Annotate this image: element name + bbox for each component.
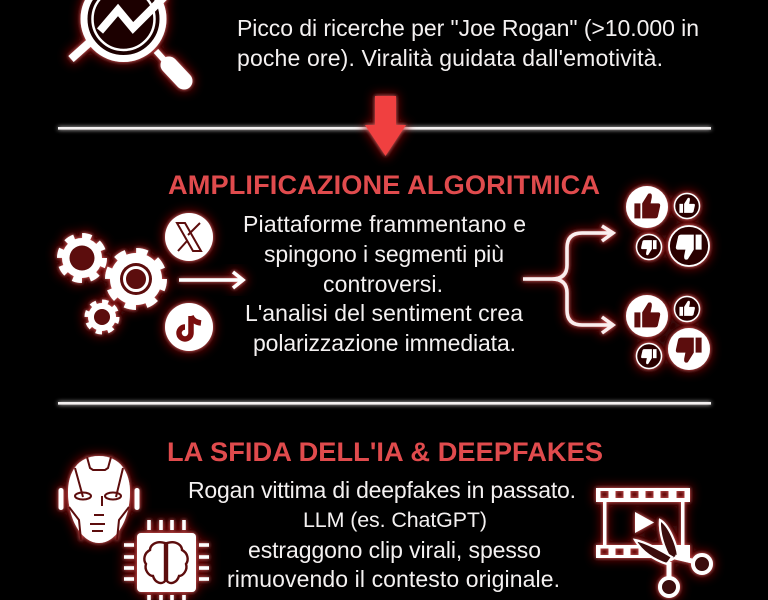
arrow: fork [523,226,613,333]
arrow: red down [365,96,406,156]
icon: AI chip with brain [124,520,209,600]
text: deepfakes: Rogan vittima di deepfakes in passato. [188,477,576,503]
text: search peak [237,15,699,71]
icon: magnifier with trend line [71,0,184,81]
icon: robot head [58,456,140,543]
text: platforms: L'analisi del sentiment crea [245,300,523,326]
text: search peak: Picco di ricerche per "Joe Rogan" (>10.000 in [237,15,699,41]
icon: X logo [165,213,213,261]
icon: film strip and scissors [596,488,711,596]
text: platforms: Piattaforme frammentano e [243,211,526,237]
text: search peak: poche ore). Viralità guidata dall'emotività. [237,45,663,71]
divider lines [58,127,711,405]
film strip [596,488,690,558]
text: deepfakes: rimuovendo il contesto originale. [227,566,560,592]
icons: reactions group 2 [626,295,710,370]
text: deepfakes [188,477,576,592]
icons: reactions group 1 [626,186,709,266]
heading: amplificazione algoritmica: AMPLIFICAZIONE ALGORITMICA [168,169,600,200]
text: platforms: controversi. [323,271,443,297]
text: platforms: polarizzazione immediata. [253,330,516,356]
icon: gears [60,236,163,332]
gear top left [60,236,104,280]
text: deepfakes: LLM (es. ChatGPT) [303,508,487,532]
text: deepfakes: estraggono clip virali, spesso [248,537,541,563]
text: platforms [243,211,526,356]
gear large [109,252,163,306]
icon: TikTok logo [165,303,213,351]
gear small [87,302,117,332]
heading: la sfida dell'IA: LA SFIDA DELL'IA & DEEPFAKES [167,436,603,467]
arrow: gears to text [179,272,243,288]
scissors [635,520,711,596]
text: platforms: spingono i segmenti più [264,241,504,267]
play button [635,512,654,533]
